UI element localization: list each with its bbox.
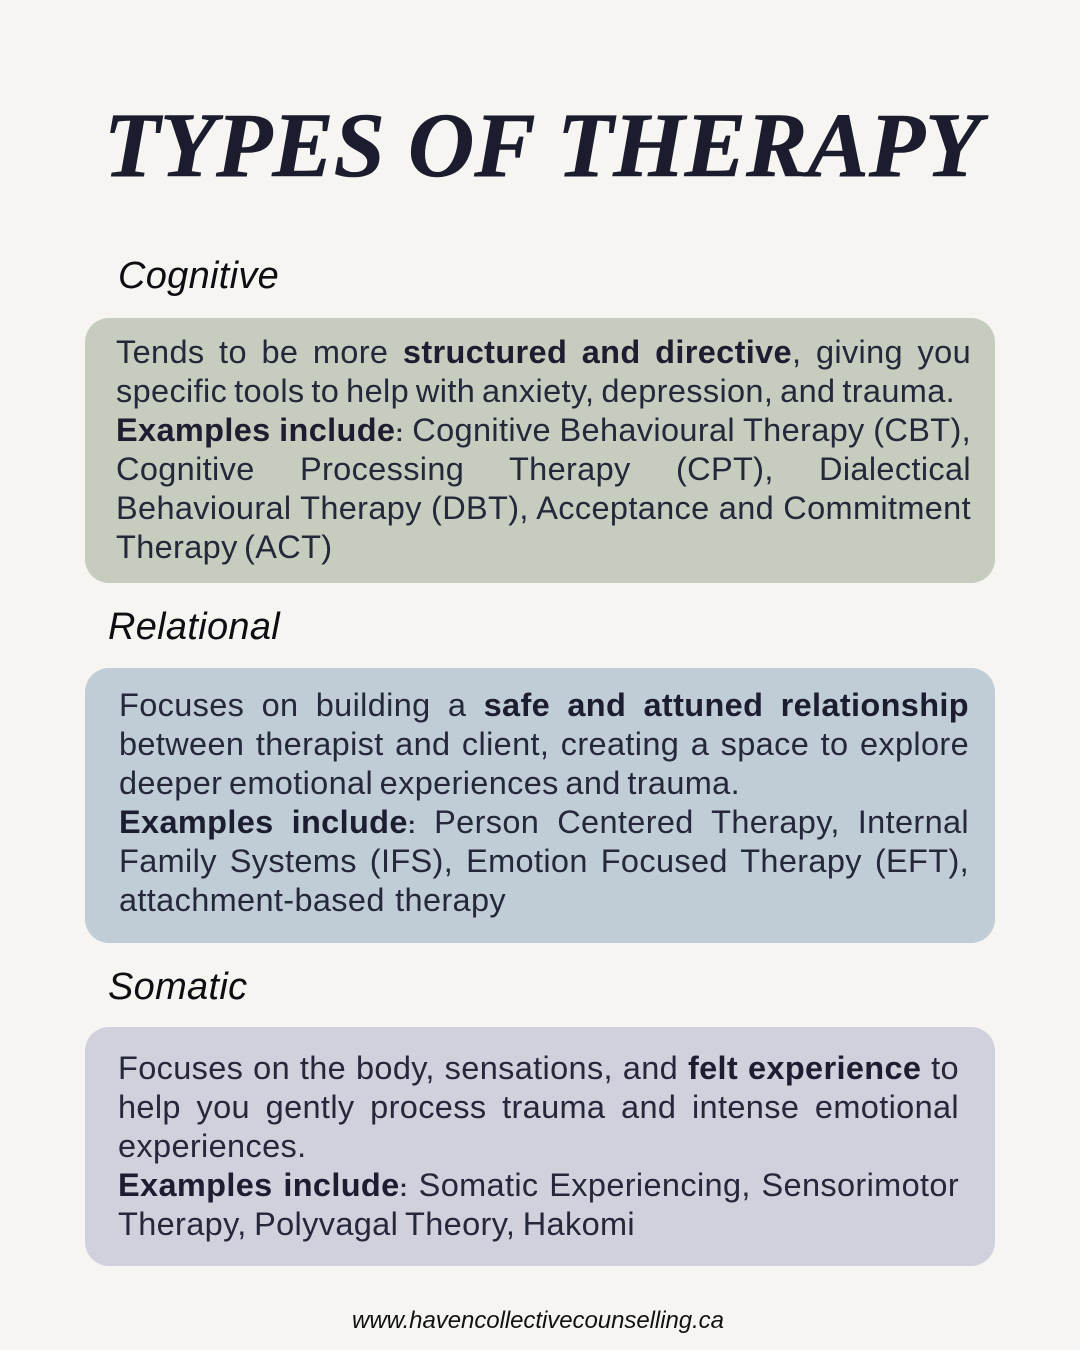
- heading: Cognitive: Cognitive: [118, 255, 279, 297]
- panel: Somatic: Focuses on the body, sensations, and felt experience to: [118, 1050, 959, 1086]
- heading: Relational: Relational: [108, 606, 280, 648]
- panel: Somatic: Therapy, Polyvagal Theory, Hakomi: [118, 1206, 635, 1242]
- panel: Relational: Focuses on building a safe and attuned relationship: [119, 687, 969, 723]
- panel: Somatic: Examples include: Somatic Experiencing, Sensorimotor: [118, 1167, 959, 1203]
- panel: Somatic: experiences.: [118, 1128, 306, 1164]
- panel: Relational: [85, 668, 995, 943]
- panel: Relational: deeper emotional experiences and trauma.: [119, 765, 740, 801]
- panel: Relational: attachment-based therapy: [119, 882, 506, 918]
- panel: Somatic: [85, 1027, 995, 1266]
- panel: Cognitive: Tends to be more structured and directive, giving you: [116, 334, 971, 370]
- panel: Relational: Examples include: Person Centered Therapy, Internal: [119, 804, 969, 840]
- panel: Cognitive: [85, 318, 995, 583]
- panel: Cognitive: Examples include: Cognitive Behavioural Therapy (CBT),: [116, 412, 971, 448]
- panel: Relational: between therapist and client, creating a space to explore: [119, 726, 969, 762]
- panel: Cognitive: Behavioural Therapy (DBT), Acceptance and Commitment: [116, 490, 971, 526]
- title: TYPES OF THERAPY: [104, 94, 981, 196]
- heading: Somatic: Somatic: [108, 966, 247, 1008]
- panel: Somatic: help you gently process trauma and intense emotional: [118, 1089, 959, 1125]
- panel: Cognitive: Therapy (ACT): [116, 529, 332, 565]
- panel: Relational: Family Systems (IFS), Emotion Focused Therapy (EFT),: [119, 843, 969, 879]
- panel: Cognitive: specific tools to help with anxiety, depression, and trauma.: [116, 373, 955, 409]
- footer url: www.havencollectivecounselling.ca: [352, 1307, 724, 1334]
- panel: Cognitive: Cognitive Processing Therapy (CPT), Dialectical: [116, 451, 971, 487]
